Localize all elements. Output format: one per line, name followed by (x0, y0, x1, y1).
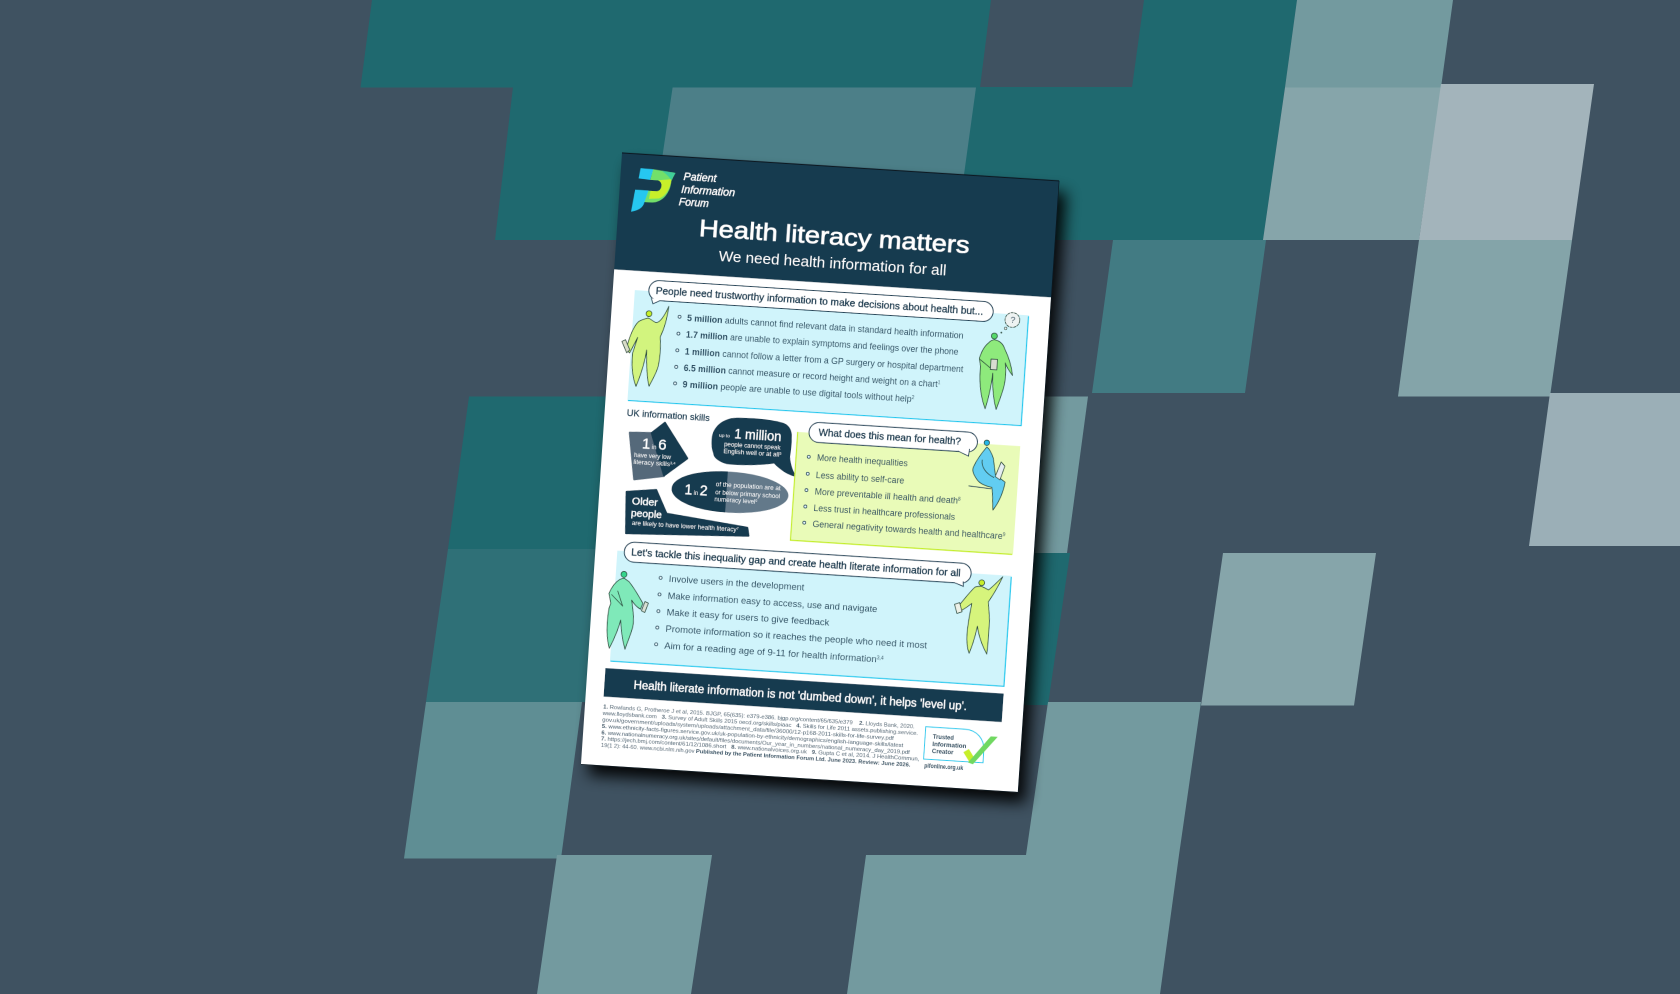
bullet list: 3,4 (877, 655, 884, 662)
speech pill heading (808, 422, 978, 457)
bullet list: 2 (912, 395, 915, 401)
header band (614, 152, 1059, 297)
bullet list: 6.5 million cannot measure or record height and weight on a chart (683, 363, 961, 392)
references: www.lloydsbank.com 3. Survey of Adult Skills 2015 oecd.org/skills/piaac 4. Skills for Life 2011 assets.publishing.service. (601, 711, 918, 737)
poster sheet (581, 152, 1059, 792)
banner: dumbed down message (604, 668, 1004, 722)
subtitle: We need health information for all (718, 248, 947, 279)
stat: up to 1 million: 5 (779, 452, 782, 456)
badge: trusted information creator: Information (932, 741, 967, 750)
bullet list: 8 (958, 497, 961, 503)
stat: 1 in 6 (627, 421, 690, 483)
references: gov.uk/government/uploads/system/uploads/attachment_data/file/36000/12-p168-2011-skills-for-life-survey.pdf (602, 717, 894, 742)
stat: 1 in 2 (670, 468, 790, 516)
references: 1. Rowlands G, Protheroe J et al, 2015. BJGP, 65(635): e379-e386. bjgp.org/content/65/635/e379 2. Lloyds Bank, 2020. (603, 705, 915, 730)
stat: 1 in 6: have very low (634, 453, 672, 461)
stat: up to 1 million: up to (719, 433, 731, 439)
stat: up to 1 million: English well or at all (723, 448, 779, 459)
panel: let's tackle this inequality gap (604, 541, 1012, 687)
bullet list: 1 million cannot follow a letter from a GP surgery or hospital department (684, 346, 964, 375)
icon: seated figure with laptop (967, 439, 1008, 511)
references: 5. www.ethnicity-facts-figures.service.gov.uk/uk-population-by-ethnicity/demographics/english-language-skills/latest (602, 724, 904, 749)
stat: older people: people (630, 507, 662, 521)
stat: 1 in 2: of the population are at (716, 482, 781, 492)
badge: trusted information creator: Creator (932, 748, 954, 757)
stat: older people: 7 (737, 527, 739, 531)
references (599, 704, 922, 769)
icon: figure thinking with phone (976, 311, 1020, 411)
panel: what does this mean for health (790, 421, 1021, 555)
logo mark (631, 168, 676, 214)
poster drop shadow (588, 164, 1066, 803)
bullet list: 1 (938, 380, 941, 386)
stat: 1 in 2: or below primary school (715, 490, 780, 500)
bullet list: General negativity towards health and healthcare (812, 519, 1021, 543)
bullet list: Aim for a reading age of 9-11 for health information (664, 641, 881, 665)
organisation name: Information (681, 184, 735, 199)
bullet list: Make it easy for users to give feedback (666, 607, 830, 629)
bullet list: 9 million people are unable to use digital tools without help (682, 380, 931, 406)
website: pifonline.org.uk (924, 763, 964, 772)
stat: up to 1 million (710, 416, 800, 477)
icon: figure pointing up with phone (619, 303, 669, 388)
bullet list (654, 573, 931, 668)
stat: 1 in 2: numeracy level (714, 497, 755, 506)
organisation name: Patient (683, 171, 718, 185)
panel: people need trustworthy information (618, 279, 1030, 426)
bullet list: Less trust in healthcare professionals (813, 503, 956, 523)
badge: trusted information creator: Trusted (933, 734, 954, 742)
stat: up to 1 million: people cannot speak (724, 441, 782, 452)
references: 7. https://jech.bmj.com/content/61/12/1086.short 8. www.nationalvoices.org.uk 9. Gupta C et al, 2014. J HealthCommun, (601, 737, 920, 763)
organisation name (678, 171, 736, 212)
bullet list: Less ability to self-care (815, 470, 905, 487)
bullet list: Involve users in the development (668, 574, 805, 594)
stat: 1 in 6: 1 in 6 (641, 435, 667, 454)
bullet list: 1.7 million are unable to explain symptoms and feelings over the phone (686, 330, 959, 358)
bullet list: More preventable ill health and death (814, 486, 973, 507)
icon: check mark (963, 735, 998, 766)
stat: older people: Older (632, 495, 659, 509)
organisation name: Forum (678, 196, 709, 210)
bullet list: 5 million adults cannot find relevant data in standard health information (687, 313, 964, 342)
bullet list (802, 452, 1010, 542)
heading: UK information skills: UK information skills (627, 408, 710, 424)
speech pill heading: What does this mean for health? (818, 427, 961, 448)
bullet list: More health inequalities (817, 453, 908, 470)
icon: figure with phone (605, 571, 650, 651)
speech pill heading: Let's tackle this inequality gap and create health literate information for all (631, 546, 961, 579)
banner: dumbed down message: Health literate information is not 'dumbed down', it helps 'level up'. (633, 680, 967, 713)
bullet list: Promote information so it reaches the people who need it most (665, 624, 928, 652)
bullet list: 9 (1003, 532, 1006, 538)
thought bubble: ? (1010, 315, 1016, 325)
stat: older people (624, 488, 751, 541)
stat: 1 in 6: literacy skills (633, 460, 667, 468)
stat: up to 1 million: 1 million (734, 426, 782, 444)
poster (580, 152, 1067, 803)
references: 6. www.nationalnumeracy.org.uk/sites/default/files/documents/Our_year_in_numbers/national_numeracy_day_2019.pdf (601, 730, 911, 756)
stat: 1 in 2: 1 in 2 (684, 481, 708, 500)
title: Health literacy matters (698, 215, 970, 259)
stat: 1 in 6: 3,4 (670, 461, 676, 466)
icon: figure pointing up with leaflet (951, 574, 1003, 655)
bullet list: Make information easy to access, use and navigate (667, 591, 878, 615)
badge: trusted information creator (923, 727, 998, 774)
bullet list (673, 312, 966, 408)
stat: 1 in 2: 6 (755, 499, 758, 503)
stat: older people: are likely to have lower health literacy (632, 521, 731, 533)
speech pill heading: People need trustworthy information to make decisions about health but... (655, 285, 984, 318)
references: 19(1 2): 44-60. www.ncbi.nlm.nih.gov Published by the Patient Information Forum Ltd. June 2023. Review: June 2026. (601, 743, 911, 769)
